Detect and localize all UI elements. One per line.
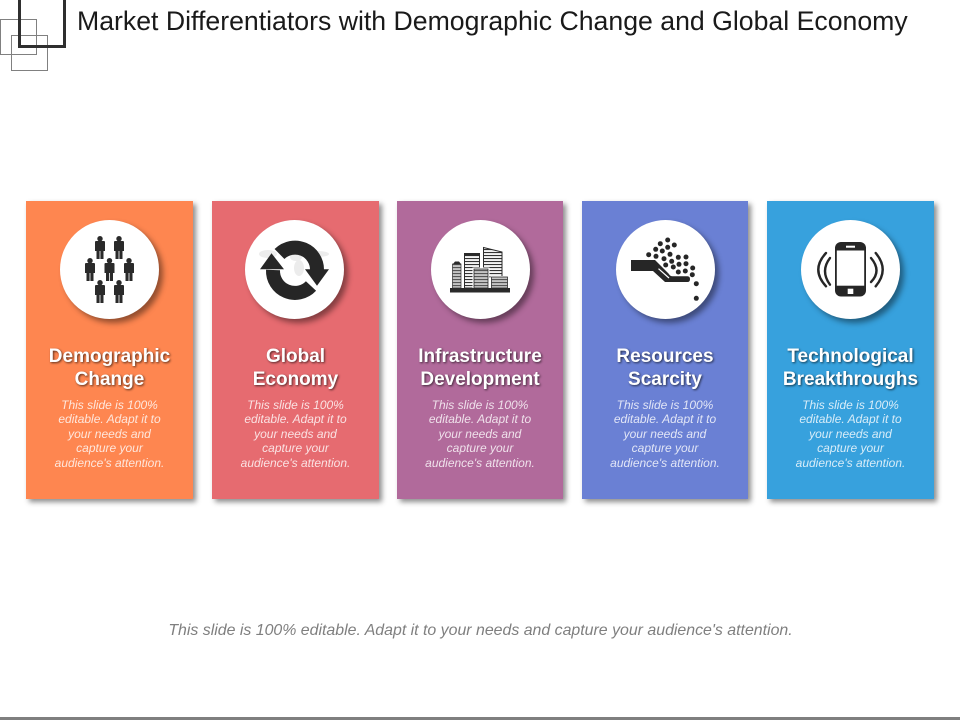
logo: overlapping squares — [0, 0, 66, 71]
text block: audience's attention. — [241, 456, 350, 470]
text block — [796, 398, 905, 470]
heading — [253, 346, 340, 392]
icon: globe with cycle arrows — [244, 220, 344, 319]
panel: Demographic Change — [26, 201, 193, 499]
panel: Global Economy — [212, 201, 379, 499]
heading: Infrastructure — [418, 346, 542, 367]
heading: Demographic — [49, 346, 170, 367]
footer bar — [0, 717, 960, 720]
panel: Resources Scarcity — [582, 201, 748, 499]
heading: Breakthroughs — [783, 369, 918, 390]
text block: your needs and — [624, 427, 706, 441]
text block — [240, 398, 350, 470]
text block: audience's attention. — [55, 456, 164, 470]
text block: capture your — [76, 441, 143, 455]
heading: Resources — [616, 346, 714, 367]
text block: audience's attention. — [796, 456, 905, 470]
text block: This slide is 100% — [617, 398, 713, 412]
heading — [49, 346, 172, 392]
icon: city buildings — [430, 220, 530, 319]
text block: editable. Adapt it to — [799, 412, 902, 426]
text block — [54, 398, 164, 470]
text block: capture your — [447, 441, 513, 455]
text block: your needs and — [439, 427, 521, 441]
caption: This slide is 100% editable. Adapt it to your needs and capture your audience's attention. — [168, 622, 793, 639]
text block — [610, 398, 720, 470]
text block: This slide is 100% — [802, 398, 899, 412]
icon: hand with falling seeds — [616, 220, 714, 319]
heading — [616, 346, 716, 392]
text block: editable. Adapt it to — [58, 412, 161, 426]
heading: Global — [266, 346, 325, 367]
heading: Change — [75, 369, 144, 390]
text block: capture your — [632, 441, 698, 455]
text block: your needs and — [68, 427, 151, 441]
text block: capture your — [817, 441, 884, 455]
panel: Infrastructure Development — [397, 201, 563, 499]
heading: Technological — [787, 346, 914, 367]
text block: capture your — [262, 441, 329, 455]
text block: audience's attention. — [425, 456, 535, 470]
heading — [783, 346, 920, 392]
heading — [418, 346, 544, 392]
text block: This slide is 100% — [247, 398, 344, 412]
title: Market Differentiators with Demographic Change and Global Economy — [77, 6, 908, 36]
heading: Economy — [253, 369, 338, 390]
text block — [425, 398, 535, 470]
text block: editable. Adapt it to — [244, 412, 347, 426]
text block: This slide is 100% — [61, 398, 158, 412]
panel: Technological Breakthroughs — [767, 201, 934, 499]
text block: audience's attention. — [610, 456, 720, 470]
text block: editable. Adapt it to — [429, 412, 531, 426]
text block: This slide is 100% — [432, 398, 528, 412]
text block: your needs and — [809, 427, 892, 441]
heading: Development — [420, 369, 540, 390]
heading: Scarcity — [628, 369, 702, 390]
text block: your needs and — [254, 427, 337, 441]
icon: vibrating phone — [800, 220, 900, 319]
icon: people — [60, 220, 158, 319]
text block: editable. Adapt it to — [614, 412, 716, 426]
